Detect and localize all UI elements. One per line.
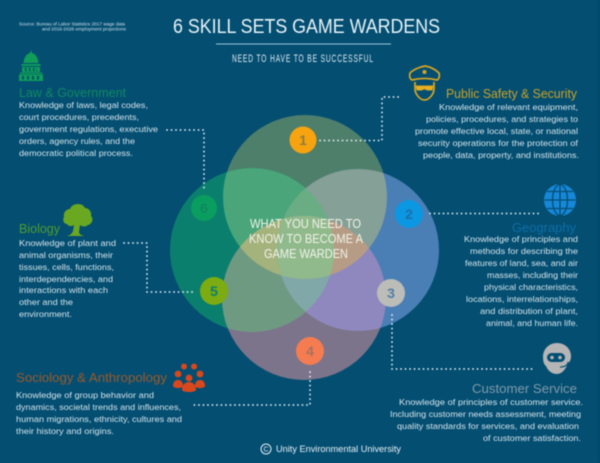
center text: GAME WARDEN bbox=[264, 246, 348, 261]
panel: biology bbox=[19, 222, 116, 319]
source note: Source: Bureau of Labor Statistics 2017 wage data bbox=[19, 22, 126, 26]
panel: geography: methods for describing the bbox=[470, 246, 578, 256]
source note: and 2016-2026 employment projections bbox=[42, 26, 127, 32]
icon: tree bbox=[63, 204, 92, 236]
panel: sociology and anthropology: dynamics, societal trends and influences, bbox=[16, 402, 181, 412]
subtitle: NEED TO HAVE TO BE SUCCESSFUL bbox=[232, 52, 373, 64]
panel: customer service: quality standards for services, and evaluation bbox=[397, 421, 579, 431]
panel: biology: tissues, cells, functions, bbox=[19, 262, 114, 272]
number 2 bbox=[395, 200, 423, 228]
panel: geography bbox=[464, 221, 578, 328]
panel: sociology and anthropology: Knowledge of group behavior and bbox=[16, 390, 154, 400]
connector 5 bbox=[124, 243, 195, 292]
source note bbox=[19, 22, 127, 32]
connector 6 bbox=[167, 130, 204, 190]
number 6: 6 bbox=[200, 200, 208, 216]
panel: customer service: Including customer needs assessment, meeting bbox=[390, 409, 581, 419]
panel: biology: animal organisms, their bbox=[19, 250, 113, 260]
center text: KNOW TO BECOME A bbox=[249, 231, 363, 246]
panel: public safety and security: Knowledge of relevant equipment, bbox=[439, 102, 578, 112]
number 4: 4 bbox=[306, 343, 314, 359]
panel: public safety and security bbox=[415, 87, 579, 160]
number 3: 3 bbox=[387, 285, 395, 301]
center text: WHAT YOU NEED TO bbox=[250, 216, 361, 231]
copyright footer: Unity Environmental University bbox=[276, 444, 401, 455]
panel: law and government: Law & Government bbox=[19, 86, 127, 100]
connector 1 bbox=[320, 97, 402, 140]
panel: public safety and security: policies, procedures, and strategies to bbox=[426, 114, 578, 124]
panel: sociology and anthropology: Sociology & Anthropology bbox=[16, 371, 168, 385]
copyright footer: C bbox=[263, 446, 269, 454]
icon: customer service headset bbox=[543, 343, 571, 374]
panel: geography: masses, including their bbox=[487, 270, 578, 280]
panel: geography: Knowledge of principles and bbox=[464, 234, 578, 244]
panel: biology: other and the bbox=[19, 297, 73, 307]
panel: sociology and anthropology: human migrations, ethnicity, cultures and bbox=[16, 414, 182, 424]
panel: biology: interdependencies, and bbox=[19, 274, 113, 284]
panel: biology: environment. bbox=[19, 309, 72, 319]
number 5 bbox=[200, 277, 228, 305]
number 2: 2 bbox=[405, 206, 413, 222]
panel: law and government: orders, agency rules, and the bbox=[19, 136, 135, 146]
panel: biology: Biology bbox=[19, 222, 61, 236]
panel: law and government: court procedures, precedents, bbox=[19, 112, 139, 122]
venn diagram bbox=[170, 115, 439, 380]
panel: customer service: Knowledge of principles of customer service. bbox=[399, 397, 583, 407]
panel: geography: physical characteristics, bbox=[484, 282, 578, 292]
number 1: 1 bbox=[299, 132, 307, 148]
panel: public safety and security: Public Safety & Security bbox=[446, 87, 578, 101]
panel: customer service: Customer Service bbox=[472, 382, 577, 396]
number 3 bbox=[377, 279, 405, 307]
connector 2 bbox=[430, 212, 540, 214]
panel: law and government: government regulations, executive bbox=[19, 124, 158, 134]
panel: customer service bbox=[390, 382, 583, 443]
panel: customer service: of customer satisfaction. bbox=[483, 433, 581, 443]
panel: law and government: Knowledge of laws, legal codes, bbox=[19, 100, 148, 110]
panel: public safety and security: promote effective local, state, or national bbox=[415, 126, 578, 136]
panel: geography: and distribution of plant, bbox=[480, 306, 578, 316]
icon: globe bbox=[544, 184, 576, 216]
panel: geography: Geography bbox=[512, 221, 577, 235]
connector 3 bbox=[392, 315, 532, 369]
icon: capitol building bbox=[19, 50, 43, 81]
icon: police officer bbox=[410, 66, 439, 100]
number 1 bbox=[290, 126, 316, 154]
panel: law and government: democratic political process. bbox=[19, 148, 133, 158]
panel: geography: locations, interrelationships, bbox=[466, 294, 578, 304]
title: 6 SKILL SETS GAME WARDENS bbox=[173, 16, 440, 38]
panel: public safety and security: security operations for the protection of bbox=[418, 138, 579, 148]
icon: group of people bbox=[173, 364, 205, 392]
panel: geography: features of land, sea, and air bbox=[465, 258, 578, 268]
panel: sociology and anthropology: their history and origins. bbox=[16, 426, 114, 436]
panel: biology: Knowledge of plant and bbox=[19, 238, 116, 248]
connector 4 bbox=[192, 372, 310, 405]
number 5: 5 bbox=[210, 283, 218, 299]
center text bbox=[249, 216, 363, 261]
number 4 bbox=[296, 337, 324, 365]
panel: law and government bbox=[19, 86, 158, 158]
number 6 bbox=[191, 195, 217, 221]
panel: geography: animal, and human life. bbox=[486, 318, 578, 328]
panel: sociology and anthropology bbox=[16, 371, 182, 436]
panel: public safety and security: people, data, property, and institutions. bbox=[423, 150, 579, 160]
panel: biology: interactions with each bbox=[19, 285, 108, 295]
